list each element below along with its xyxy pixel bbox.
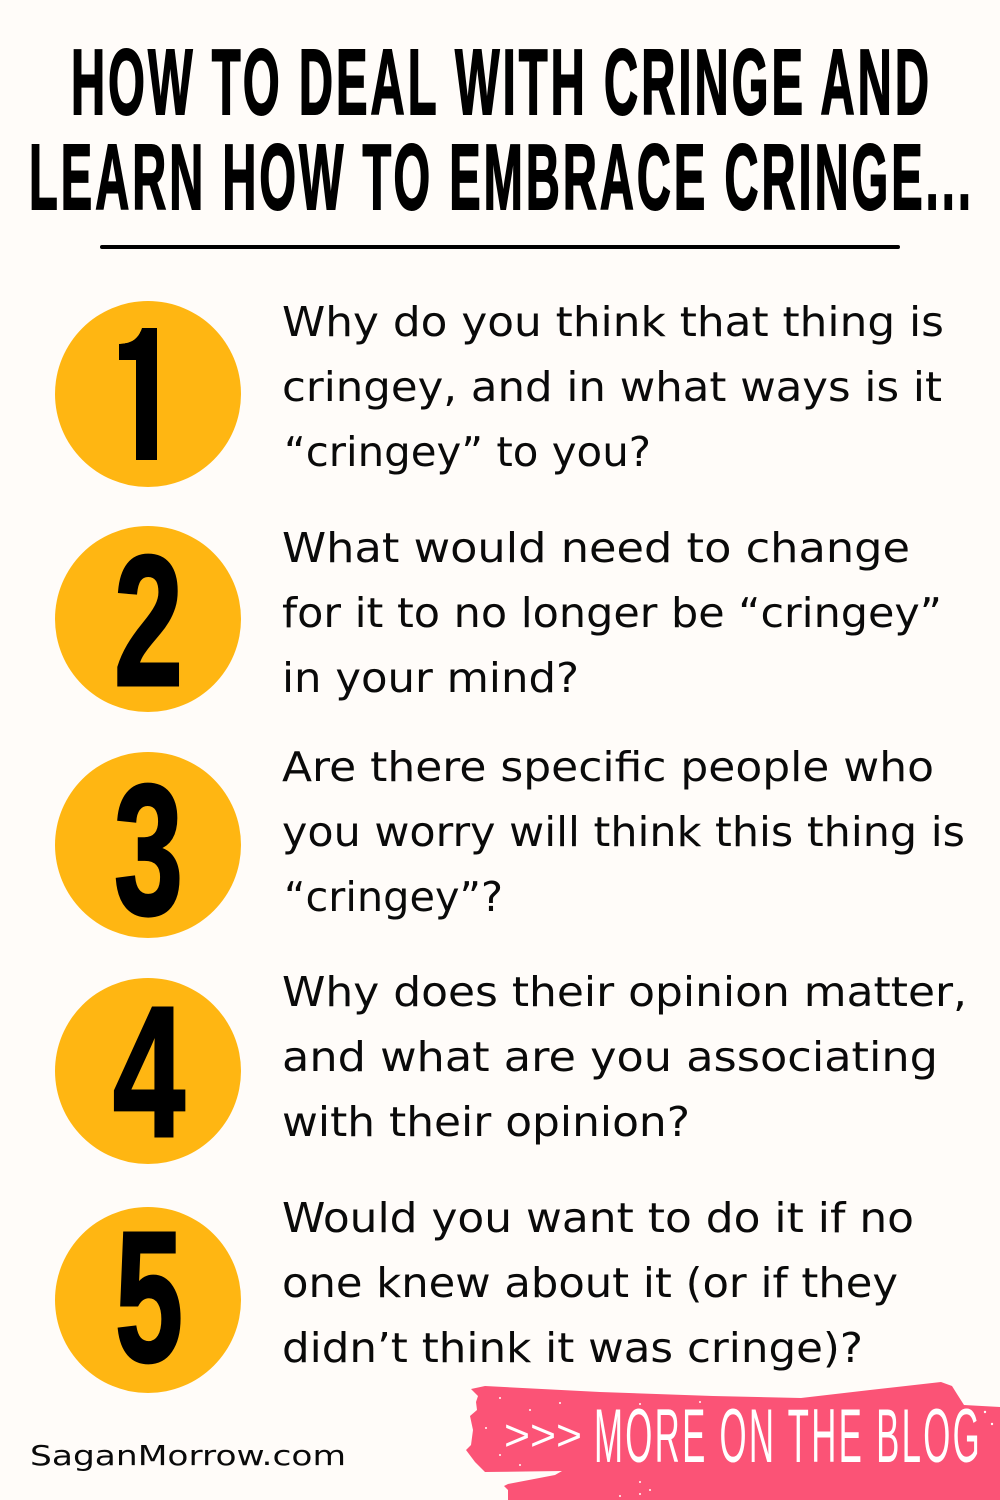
question 1 text: cringey, and in what ways is it bbox=[282, 363, 942, 411]
question 3 text: “cringey”? bbox=[284, 873, 503, 921]
number badge 5 bbox=[55, 1194, 241, 1401]
question 5 text bbox=[282, 1194, 914, 1372]
question 4 text bbox=[282, 968, 967, 1146]
question 5 text: one knew about it (or if they bbox=[282, 1259, 898, 1307]
question 1 text: Why do you think that thing is bbox=[282, 298, 944, 346]
number badge 4 bbox=[55, 969, 241, 1176]
question 2 text: What would need to change bbox=[282, 524, 910, 572]
number badge 1: 1 bbox=[100, 293, 190, 500]
brush stroke background bbox=[466, 1382, 1000, 1500]
question 2 text: for it to no longer be “cringey” bbox=[282, 589, 942, 637]
question 4 text: and what are you associating bbox=[282, 1033, 938, 1081]
question 2 text: in your mind? bbox=[282, 654, 579, 702]
item 3 bbox=[55, 743, 965, 954]
question 4 text: Why does their opinion matter, bbox=[282, 968, 967, 1016]
number badge 5: 5 bbox=[115, 1194, 183, 1401]
question 4 text: with their opinion? bbox=[282, 1098, 690, 1146]
number badge 3 bbox=[55, 747, 241, 954]
arrows: >>> bbox=[504, 1411, 582, 1460]
item 1 bbox=[55, 301, 942, 487]
question 3 text bbox=[282, 743, 965, 921]
question 1 text bbox=[282, 298, 944, 476]
number badge 4: 4 bbox=[113, 969, 185, 1176]
item 4 bbox=[55, 968, 967, 1176]
question 5 text: didn’t think it was cringe)? bbox=[282, 1324, 863, 1372]
item 5 bbox=[55, 1194, 914, 1401]
question 2 text bbox=[282, 524, 942, 702]
question 1 text: “cringey” to you? bbox=[284, 428, 651, 476]
question 3 text: Are there specific people who bbox=[282, 743, 934, 791]
question 3 text: you worry will think this thing is bbox=[282, 808, 965, 856]
item 2 bbox=[55, 518, 942, 725]
number badge 3: 3 bbox=[114, 747, 183, 954]
number badge 2 bbox=[55, 518, 241, 725]
question 5 text: Would you want to do it if no bbox=[282, 1194, 914, 1242]
call to action banner bbox=[466, 1382, 1000, 1500]
title bbox=[29, 30, 974, 229]
website url: SaganMorrow.com bbox=[30, 1439, 346, 1472]
number badge 1 bbox=[55, 301, 241, 487]
number badge 2: 2 bbox=[114, 518, 183, 725]
